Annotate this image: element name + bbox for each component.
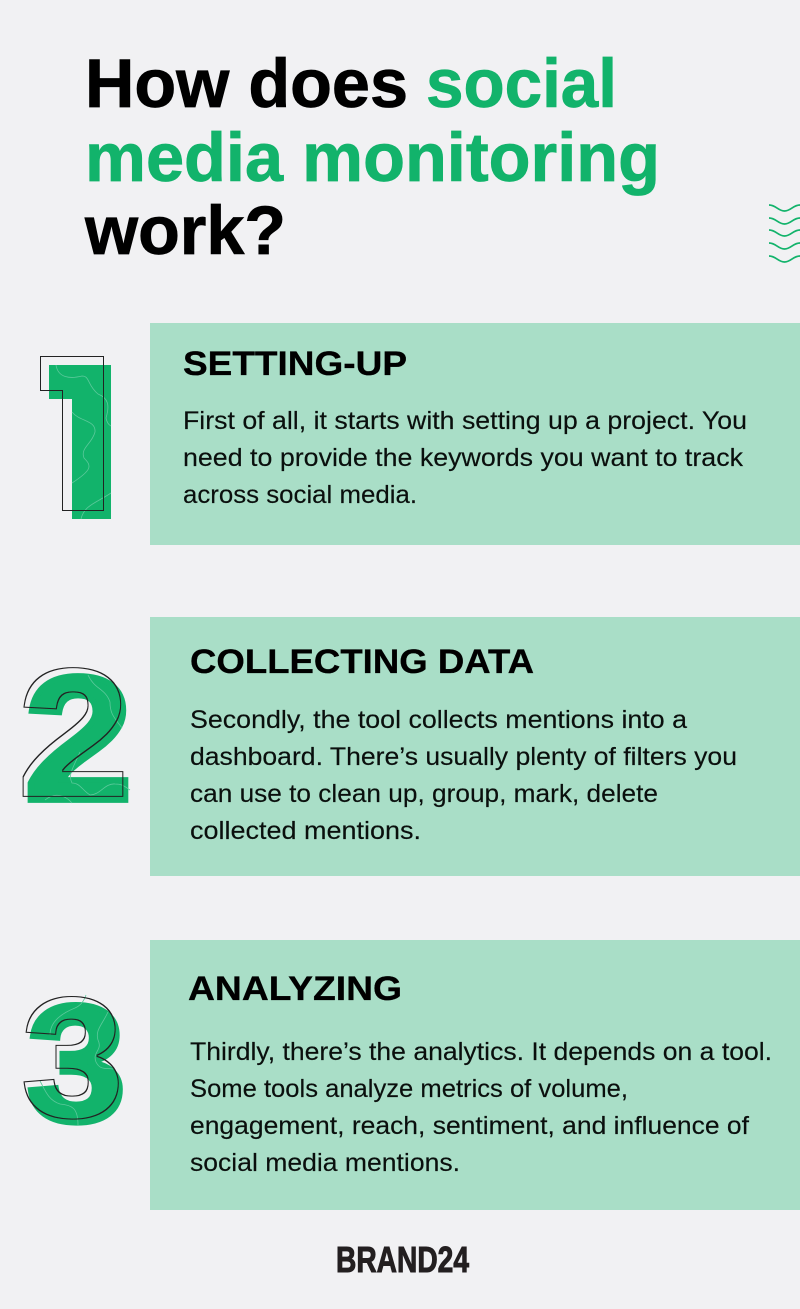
text block: analyzing: Thirdly, there’s the analytics. It depends on a tool. bbox=[190, 1038, 772, 1066]
text block: collecting data: dashboard. There’s usually plenty of filters you bbox=[190, 743, 737, 771]
text block: collecting data bbox=[190, 706, 737, 845]
heading: setting-up: SETTING-UP bbox=[183, 345, 407, 383]
number 2: 2 bbox=[24, 639, 133, 838]
text block: setting-up: need to provide the keywords you want to track bbox=[183, 444, 744, 472]
number 1 bbox=[40, 356, 112, 520]
text block: setting-up bbox=[183, 407, 747, 509]
panel: setting-up bbox=[150, 323, 800, 545]
text block: collecting data: Secondly, the tool collects mentions into a bbox=[190, 706, 687, 734]
text block: analyzing bbox=[190, 1038, 772, 1177]
number 3: 3 bbox=[27, 970, 126, 1157]
text block: analyzing: social media mentions. bbox=[190, 1149, 460, 1177]
title: work? bbox=[84, 192, 286, 269]
text block: collecting data: can use to clean up, group, mark, delete bbox=[190, 780, 658, 808]
panel: analyzing bbox=[150, 940, 800, 1210]
title: social bbox=[426, 45, 617, 122]
title: How does bbox=[85, 45, 408, 122]
decorative waves bbox=[769, 205, 800, 262]
heading: analyzing: ANALYZING bbox=[188, 970, 402, 1008]
title bbox=[84, 45, 660, 269]
text block: analyzing: Some tools analyze metrics of volume, bbox=[190, 1075, 628, 1103]
title: media monitoring bbox=[85, 119, 660, 196]
outline of number 3: 3 bbox=[23, 964, 122, 1151]
outline of number 1: 1 bbox=[15, 317, 137, 558]
number 1: 1 bbox=[24, 325, 146, 566]
text block: setting-up: First of all, it starts with setting up a project. You bbox=[183, 407, 747, 435]
text block: collecting data: collected mentions. bbox=[190, 817, 421, 845]
text block: setting-up: across social media. bbox=[183, 481, 417, 509]
logo: Brand24: BRAND24 bbox=[336, 1239, 469, 1280]
text block: analyzing: engagement, reach, sentiment, and influence of bbox=[190, 1112, 749, 1140]
outline of number 2: 2 bbox=[19, 633, 128, 832]
panel: collecting data bbox=[150, 617, 800, 876]
heading: collecting data: COLLECTING DATA bbox=[190, 643, 534, 681]
